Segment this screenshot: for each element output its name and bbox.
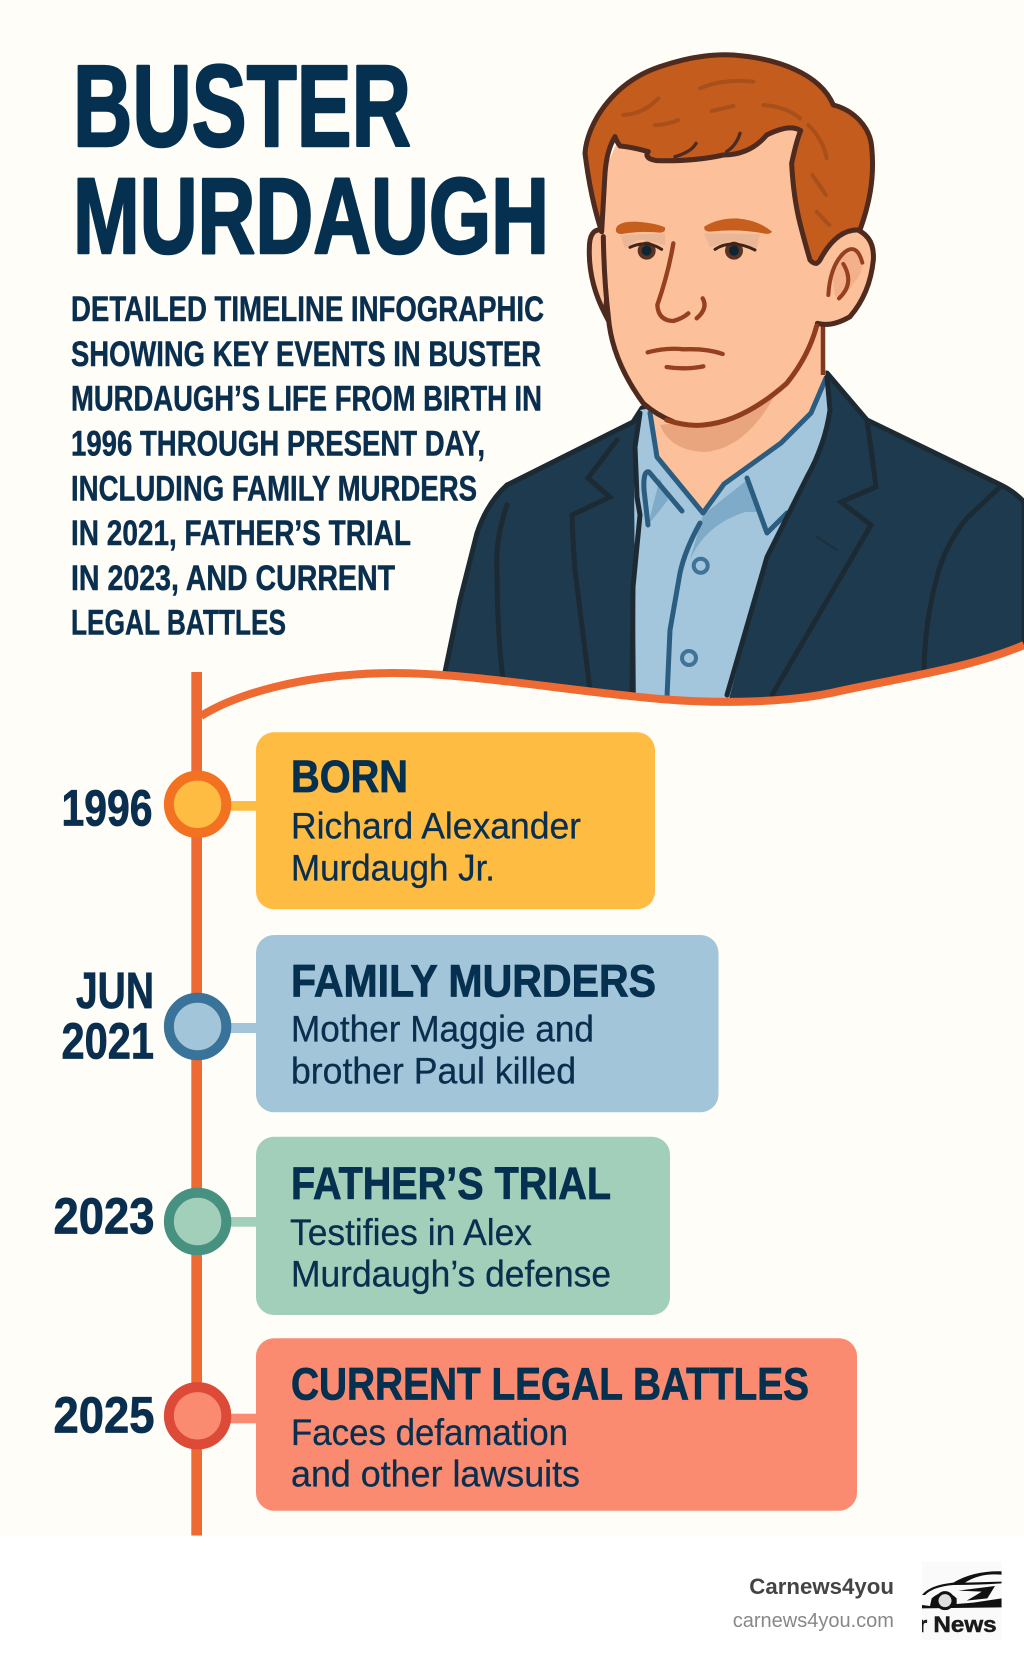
shirt collar shadow: [648, 478, 758, 560]
timeline axis: [191, 672, 202, 1536]
neck: [640, 320, 826, 513]
neck shadow: [660, 395, 775, 452]
eyebrows: [616, 218, 772, 234]
hair: [585, 55, 873, 263]
hair highlights: [623, 81, 829, 225]
title: [73, 41, 549, 276]
card heading: FATHER’S TRIAL: [291, 1158, 611, 1209]
year label: [62, 962, 154, 1069]
card body: Richard Alexander: [291, 805, 581, 846]
face: [603, 127, 827, 425]
orange wave divider: [201, 645, 1024, 716]
event: 2025 current legal battles: [54, 1338, 857, 1511]
eye shadows: [620, 233, 760, 248]
timeline node: [169, 1387, 226, 1445]
event: 1996 born: [62, 732, 655, 909]
inner ear shading: [832, 252, 862, 297]
head: [585, 55, 873, 425]
connector: [228, 1217, 258, 1227]
subtitle text block: DETAILED TIMELINE INFOGRAPHIC: [71, 290, 544, 329]
jaw line left: [603, 237, 673, 422]
shirt collar lines: [644, 378, 826, 697]
nose: [657, 243, 705, 321]
card body: Faces defamation: [291, 1412, 568, 1453]
portrait illustration: [440, 55, 1024, 720]
card: [256, 935, 718, 1112]
mouth: [648, 349, 723, 368]
card heading: CURRENT LEGAL BATTLES: [291, 1358, 809, 1409]
footer brand text: [733, 1574, 894, 1632]
connector: [228, 1414, 258, 1423]
subtitle text block: 1996 THROUGH PRESENT DAY,: [71, 424, 485, 464]
card: [256, 732, 655, 909]
connector: [228, 1023, 258, 1033]
ear outline: [817, 228, 873, 324]
year label: 2021: [62, 1012, 154, 1069]
year label: JUN: [76, 962, 154, 1019]
timeline node: [169, 998, 226, 1055]
card heading: BORN: [291, 751, 408, 802]
connector: [228, 801, 258, 811]
cover below wave: [201, 645, 1024, 800]
card heading: FAMILY MURDERS: [291, 956, 656, 1007]
footer logo: [922, 1571, 1002, 1632]
card body: Murdaugh’s defense: [291, 1254, 611, 1295]
inner ear lines: [828, 249, 862, 298]
card body: and other lawsuits: [291, 1454, 580, 1495]
footer brand text: Carnews4you: [749, 1574, 894, 1599]
card: [256, 1338, 857, 1511]
card body: [290, 1212, 611, 1295]
year label: 2025: [54, 1387, 154, 1444]
right ear: [807, 228, 873, 324]
subtitle text block: [71, 290, 544, 642]
jacket: [440, 373, 1024, 720]
shirt: [634, 375, 828, 710]
card body: Testifies in Alex: [290, 1212, 532, 1253]
neck right edge: [821, 325, 825, 375]
subtitle text block: LEGAL BATTLES: [71, 604, 286, 642]
logo wordmark: [922, 1616, 996, 1632]
logo wordmark: r: [919, 1612, 928, 1637]
event: 2023 father's trial: [54, 1137, 670, 1315]
card body: [291, 1412, 580, 1495]
jaw line right: [667, 326, 817, 425]
card body: Mother Maggie and: [291, 1009, 594, 1050]
subtitle text block: IN 2023, AND CURRENT: [71, 559, 395, 598]
card body: [291, 805, 581, 889]
event: June 2021 family murders: [62, 935, 718, 1112]
jacket seam and lapel lines: [497, 377, 999, 695]
card body: brother Paul killed: [291, 1050, 576, 1091]
year label: 1996: [62, 780, 152, 837]
year label: 2023: [54, 1187, 154, 1244]
timeline node: [169, 776, 226, 833]
eyes: [630, 242, 755, 260]
subtitle text block: SHOWING KEY EVENTS IN BUSTER: [71, 335, 541, 374]
card: [256, 1137, 670, 1315]
card body: [291, 1009, 594, 1091]
subtitle text block: INCLUDING FAMILY MURDERS: [71, 470, 477, 508]
logo wordmark: News: [933, 1612, 997, 1637]
subtitle text block: MURDAUGH’S LIFE FROM BIRTH IN: [71, 380, 542, 418]
card body: Murdaugh Jr.: [291, 848, 495, 889]
footer brand text: carnews4you.com: [733, 1610, 894, 1632]
title: MURDAUGH: [73, 155, 549, 276]
timeline node: [169, 1193, 226, 1250]
title: BUSTER: [73, 41, 411, 171]
subtitle text block: IN 2021, FATHER’S TRIAL: [71, 514, 411, 553]
icon: car: [922, 1571, 1002, 1609]
hair fringe strokes: [675, 133, 740, 157]
shirt buttons: [682, 559, 708, 665]
left ear: [589, 230, 613, 314]
